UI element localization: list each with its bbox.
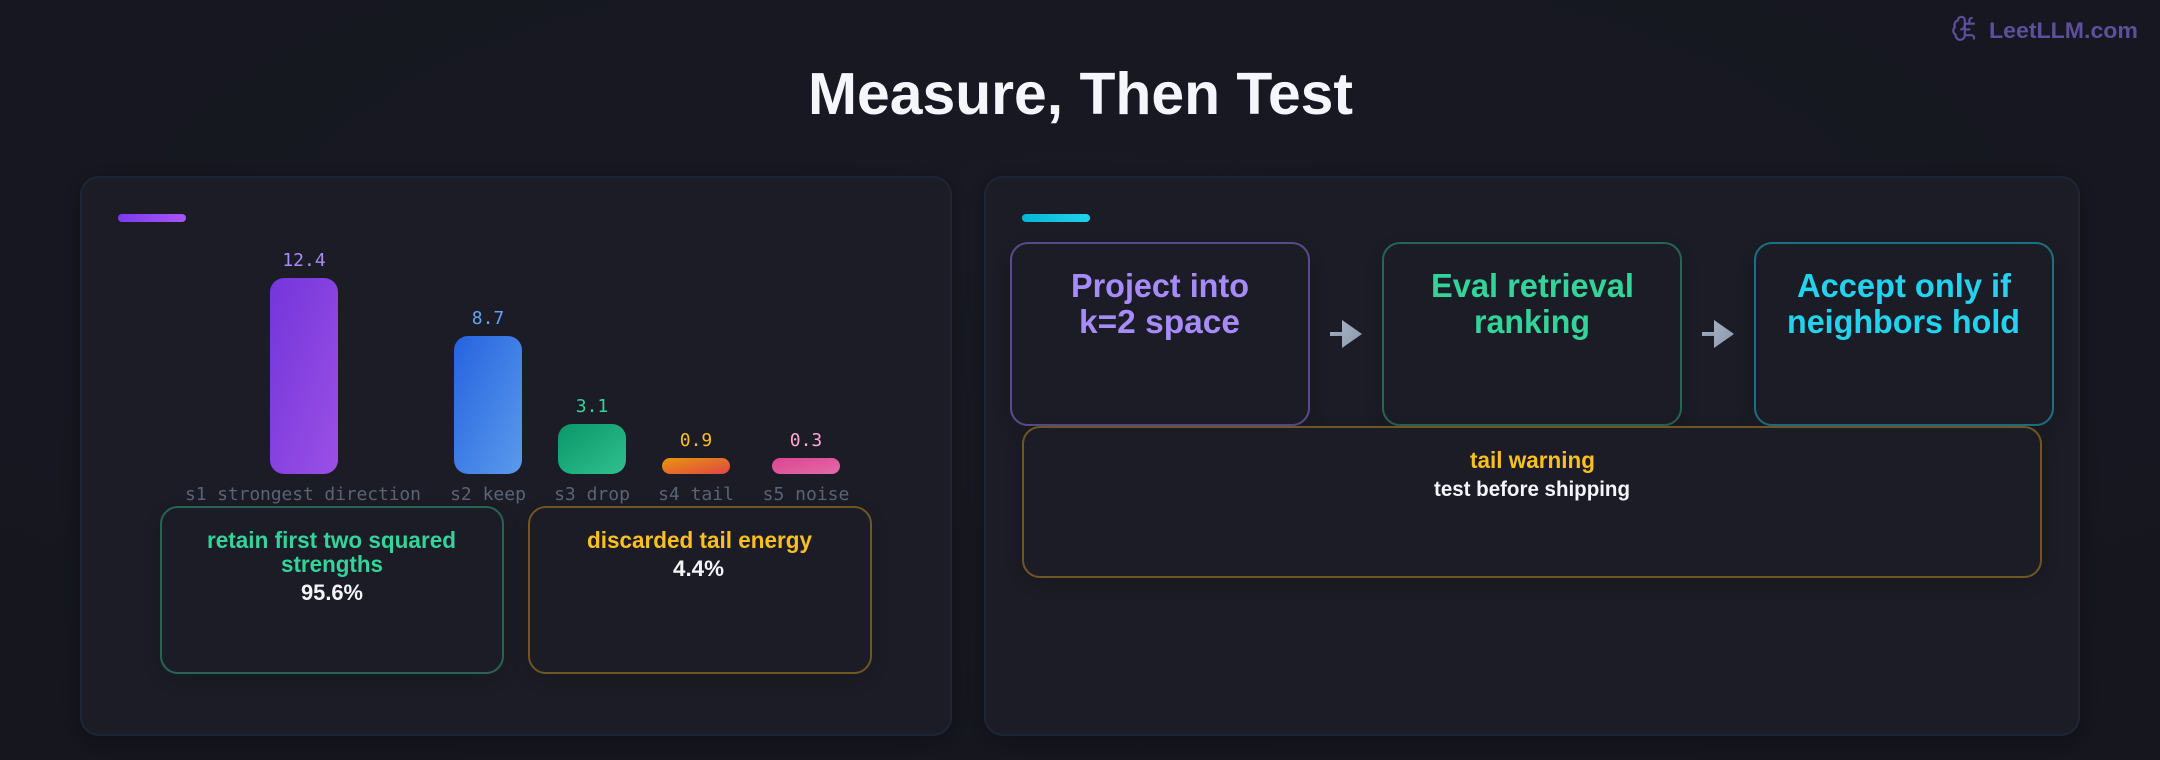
bar: s2 <box>450 308 526 505</box>
arrow: eval to accept <box>1702 320 1734 348</box>
flow step: eval <box>1383 243 1681 425</box>
bar: s5: 0.3 <box>790 430 822 451</box>
bar: s3: s3 drop <box>554 484 630 505</box>
flow step: eval: ranking <box>1474 303 1590 340</box>
callout: retained energy: 95.6% <box>301 580 363 605</box>
callout: retained energy: retain first two squared <box>207 527 456 553</box>
flow step: eval: Eval retrieval <box>1431 267 1634 304</box>
flow step: project: k=2 space <box>1079 303 1240 340</box>
bar: s4: s4 tail <box>658 484 734 505</box>
arrow: project to eval <box>1330 320 1362 348</box>
callout: discarded energy <box>529 507 871 673</box>
callout: tail warning: tail warning <box>1470 447 1595 473</box>
bar: s4: 0.9 <box>680 430 712 451</box>
icon: brain circuit <box>1953 17 1974 40</box>
callout: tail warning <box>1023 427 2041 577</box>
panel: singular value strengths <box>81 177 951 735</box>
bar: s5: s5 noise <box>763 484 849 505</box>
panel: evaluation flow <box>985 177 2079 735</box>
accent bar: purple <box>118 214 186 222</box>
callout: tail warning: test before shipping <box>1434 478 1630 501</box>
flow step: project: Project into <box>1071 267 1249 304</box>
bar: s2: 8.7 <box>472 308 504 329</box>
callout: discarded energy: discarded tail energy <box>587 527 812 553</box>
flow step: accept: Accept only if <box>1797 267 2012 304</box>
bar: s1 <box>185 250 421 505</box>
bar: s5 <box>763 430 849 505</box>
title: Measure, Then Test <box>808 61 1353 127</box>
logo: LeetLLM.com: LeetLLM.com <box>1989 18 2138 43</box>
callout: retained energy <box>161 507 503 673</box>
bar: s2: s2 keep <box>450 484 526 505</box>
bar: s1: 12.4 <box>282 250 326 271</box>
bar: s4 <box>658 430 734 505</box>
bar: s3: 3.1 <box>576 396 608 417</box>
flow step: accept: neighbors hold <box>1787 303 2020 340</box>
bar: s1: s1 strongest direction <box>185 484 421 505</box>
callout: discarded energy: 4.4% <box>673 556 724 581</box>
bar chart <box>185 250 849 505</box>
accent bar: cyan <box>1022 214 1090 222</box>
flow step: project <box>1011 243 1309 425</box>
flow step: accept <box>1755 243 2053 425</box>
bar: s3 <box>554 396 630 505</box>
callout: retained energy: strengths <box>281 551 383 577</box>
